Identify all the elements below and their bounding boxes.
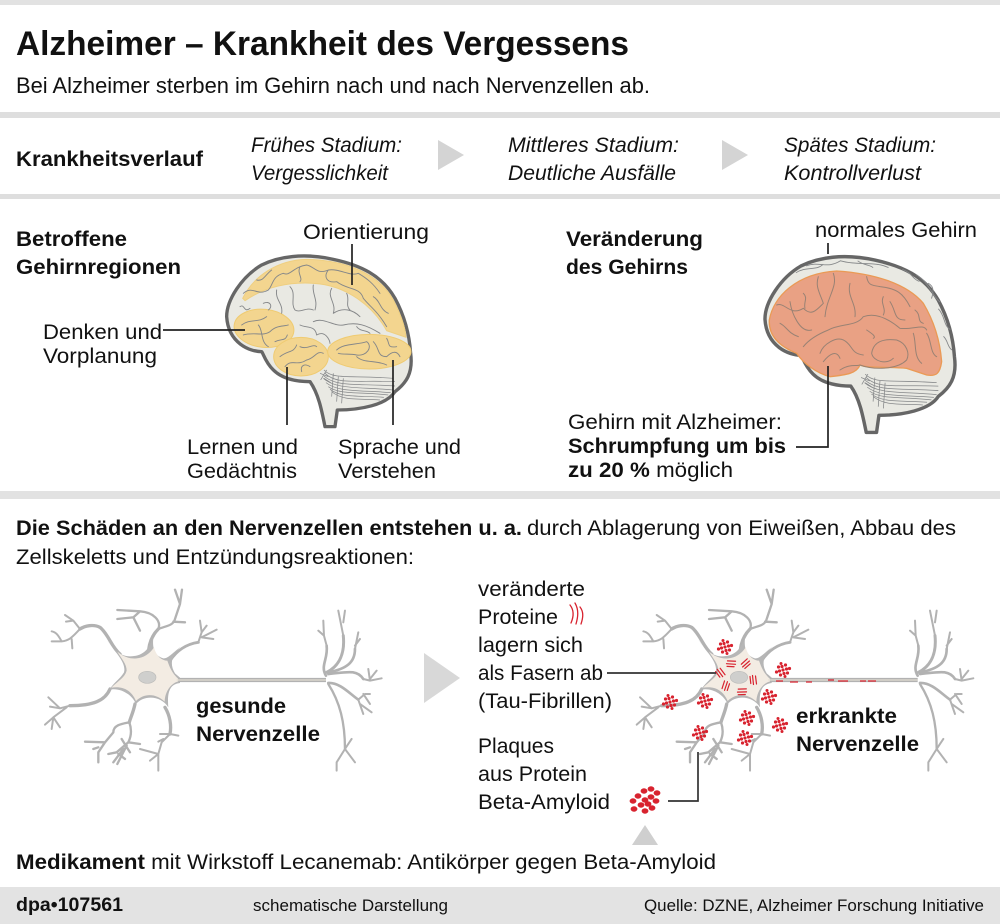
label: altered proteins: Proteine [478, 605, 558, 629]
panel: affected brain regions [16, 220, 461, 483]
label: Sprache und Verstehen: Verstehen [338, 459, 436, 483]
label: plaques: Plaques [478, 734, 554, 758]
agency credit: dpa•107561 [16, 895, 123, 916]
stage: early: Vergesslichkeit [251, 161, 389, 185]
arrow: middle to late [722, 140, 748, 170]
heading: Veränderung des Gehirns: Veränderung [566, 227, 703, 251]
diseased neuron diagram [637, 590, 973, 771]
divider band above disease course [0, 112, 1000, 118]
label: plaques: Beta-Amyloid [478, 790, 610, 814]
label: gesunde Nervenzelle [196, 694, 320, 746]
stage: late: Kontrollverlust [784, 161, 922, 185]
stage: middle: Deutliche Ausfälle [508, 161, 676, 185]
panel: diseased neuron [478, 577, 973, 845]
arrow: drug against plaques [632, 825, 658, 845]
stage: middle [508, 133, 679, 185]
panel: healthy neuron [45, 590, 382, 771]
top grey strip [0, 0, 1000, 5]
stage: early: Frühes Stadium: [251, 133, 402, 157]
text block: cause of nerve damage: durch Ablagerung von Eiweißen, Abbau des [527, 516, 956, 540]
label: erkrankte Nervenzelle [796, 704, 919, 756]
stage: early [251, 133, 402, 185]
label: Gehirn mit Alzheimer [568, 366, 828, 482]
arrow: healthy to diseased [424, 653, 460, 703]
title: Alzheimer – Krankheit des Vergessens [16, 25, 629, 63]
label: Lernen und Gedächtnis [187, 367, 298, 483]
tau fibrils in cell body [715, 659, 756, 695]
label: erkrankte Nervenzelle: erkrankte [796, 704, 897, 728]
label: normales Gehirn: normales Gehirn [815, 218, 977, 242]
tau fibrils in axon [776, 680, 876, 682]
brain with highlighted regions [227, 256, 411, 427]
label: gesunde Nervenzelle: Nervenzelle [196, 722, 320, 746]
heading: Betroffene Gehirnregionen: Gehirnregionen [16, 255, 181, 279]
label: altered proteins: als Fasern ab [478, 661, 603, 685]
label: altered proteins [478, 577, 612, 713]
label: altered proteins: lagern sich [478, 633, 583, 657]
text block: cause of nerve damage [16, 516, 956, 569]
text block: drug: Medikament mit Wirkstoff Lecanemab: Antikörper gegen Beta-Amyloid [16, 850, 716, 874]
divider band below disease course [0, 194, 1000, 199]
text block: cause of nerve damage: Die Schäden an den Nervenzellen entstehen u. a. [16, 516, 522, 540]
label: Orientierung: Orientierung [303, 220, 429, 244]
footer [0, 887, 1000, 924]
panel: brain change [566, 218, 977, 482]
subtitle: Bei Alzheimer sterben im Gehirn nach und nach Nervenzellen ab. [16, 73, 650, 98]
divider band above neurons [0, 491, 1000, 499]
label: Gehirn mit Alzheimer: zu 20 % möglich [568, 458, 733, 482]
label: Gehirn mit Alzheimer: Gehirn mit Alzheimer: [568, 410, 782, 434]
label: Sprache und Verstehen [338, 360, 461, 483]
icon: plaque cluster [630, 786, 660, 814]
heading: Veränderung des Gehirns [566, 227, 703, 279]
source: Quelle: DZNE, Alzheimer Forschung Initiative [644, 896, 984, 915]
label: Orientierung [303, 220, 429, 285]
leader line from plaque cluster [668, 752, 698, 801]
healthy neuron diagram [45, 590, 382, 771]
arrow: early to middle [438, 140, 464, 170]
note: schematic: schematische Darstellung [253, 896, 448, 915]
label: Denken und Vorplanung [43, 320, 245, 368]
leader line to cell body [607, 672, 716, 674]
label: altered proteins: veränderte [478, 577, 585, 601]
stage: middle: Mittleres Stadium: [508, 133, 679, 157]
heading: Betroffene Gehirnregionen: Betroffene [16, 227, 127, 251]
label: plaques: aus Protein [478, 762, 587, 786]
label: gesunde Nervenzelle: gesunde [196, 694, 286, 718]
label: Sprache und Verstehen: Sprache und [338, 435, 461, 459]
label: altered proteins: (Tau-Fibrillen) [478, 689, 612, 713]
panel: disease course [16, 133, 936, 185]
heading: Veränderung des Gehirns: des Gehirns [566, 255, 688, 279]
stage: late [784, 133, 936, 185]
label: Lernen und Gedächtnis: Gedächtnis [187, 459, 297, 483]
label: plaques [478, 734, 610, 814]
stage: late: Spätes Stadium: [784, 133, 936, 157]
amyloid plaques around neuron [662, 639, 791, 746]
heading: Krankheitsverlauf: Krankheitsverlauf [16, 147, 204, 171]
label: Denken und Vorplanung: Denken und [43, 320, 162, 344]
label: Lernen und Gedächtnis: Lernen und [187, 435, 298, 459]
text block: cause of nerve damage: Zellskeletts und Entzündungsreaktionen: [16, 545, 414, 569]
label: Gehirn mit Alzheimer: Schrumpfung um bis [568, 434, 786, 458]
heading: Betroffene Gehirnregionen [16, 227, 181, 279]
icon: protein fibres [570, 603, 583, 624]
label: erkrankte Nervenzelle: Nervenzelle [796, 732, 919, 756]
label: Denken und Vorplanung: Vorplanung [43, 344, 157, 368]
brain with shrunken area [765, 257, 955, 432]
